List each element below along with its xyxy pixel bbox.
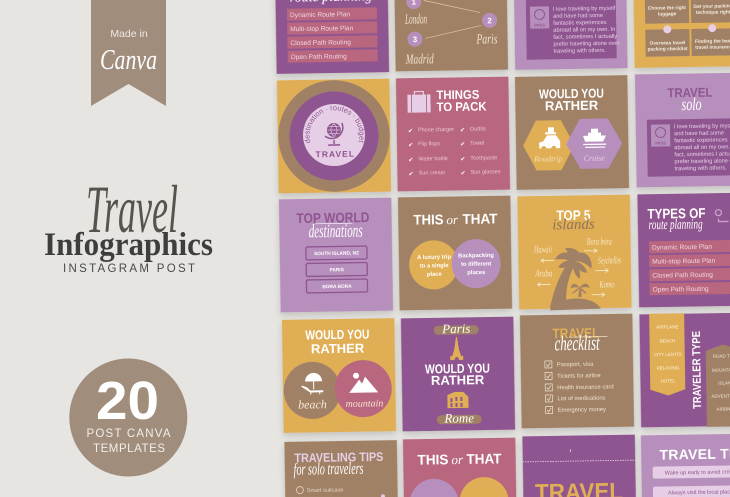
title block: INSTAGRAM POST <box>63 263 195 275</box>
card: route map <box>394 0 508 71</box>
card: things to pack: TO PACK <box>436 99 487 114</box>
card: travel checklist: TRAVEL <box>552 325 600 341</box>
card: packing tips: luggage <box>658 11 677 18</box>
card: travel solo: traveling with others. <box>675 165 727 172</box>
card: things to pack <box>396 77 510 191</box>
card: things to pack: ✔ <box>408 142 413 149</box>
card: travel globe badge <box>274 78 394 199</box>
card: solo text top: I love traveling by myself <box>553 6 616 13</box>
card: top world destinations: destinations <box>308 221 363 242</box>
card: things to pack: THINGS <box>436 88 479 102</box>
card: things to pack: Water bottle <box>418 156 448 163</box>
card: route planning top: Multi-stop Route Plan <box>290 25 354 33</box>
icon: palm tree <box>549 247 601 310</box>
card: top world destinations <box>279 198 393 312</box>
icon: car <box>539 127 560 149</box>
icon: ship <box>583 128 606 148</box>
card: things to pack: ✔ <box>460 127 465 134</box>
card: solo text top: fantastic experiences <box>553 20 607 27</box>
card: traveler type: HOTEL <box>661 378 676 384</box>
card: this or that luxury vs backpacking: places <box>467 270 485 276</box>
card: types of route planning: Open Path Routing <box>653 286 709 294</box>
card: things to pack: ✔ <box>460 141 465 148</box>
title block: Infographics <box>44 227 213 263</box>
card: things to pack: Outfits <box>470 126 486 133</box>
card: travel checklist: List of medications <box>557 396 606 402</box>
card: travel checklist: Tickets for airline <box>557 373 601 380</box>
card: top 5 islands: islands <box>552 217 595 233</box>
card: travel tips <box>641 434 730 497</box>
card: solo text top: and have had some <box>553 13 603 20</box>
title block: Travel <box>86 171 178 247</box>
card: would you rather road trip or cruise: RATHER <box>545 98 599 113</box>
card: top 5 islands: Seychelles <box>598 255 621 267</box>
card: travel solo: and have had some <box>674 130 724 137</box>
card: would you rather road trip or cruise <box>515 75 629 190</box>
card: top 5 islands: Aruba <box>535 268 552 280</box>
card: this or that luxury vs backpacking: to different <box>461 261 491 268</box>
card: top 5 islands: Bora bora <box>587 236 612 248</box>
card: things to pack: Sun cream <box>419 170 446 177</box>
card: top world destinations: PARIS <box>330 267 345 273</box>
card: top world destinations: TOP WORLD <box>296 209 370 226</box>
card: route planning top: Closed Path Routing <box>290 39 351 47</box>
card: this or that pink: THIS <box>417 451 449 468</box>
card: things to pack: Flip flops <box>418 141 440 148</box>
card: things to pack: ✔ <box>461 170 466 177</box>
card: traveling tips for solo travelers: TRAVELING TIPS <box>294 450 383 465</box>
card: top 5 islands: Komo <box>599 279 615 291</box>
card: types of route planning: Closed Path Routing <box>652 272 713 280</box>
card: route map: 3 <box>413 35 418 44</box>
card: travel globe badge: TRAVEL <box>316 149 355 159</box>
card: top 5 islands: TOP 5 <box>556 207 591 223</box>
icon: eiffel tower <box>450 337 463 360</box>
card: would you rather road trip or cruise: Cruise <box>584 153 606 163</box>
ribbon badge: Made in Canva: Canva <box>100 44 157 76</box>
card: types of route planning: route planning <box>648 217 703 233</box>
card: this or that luxury vs backpacking: THAT <box>462 210 498 227</box>
card: things to pack: Towel <box>470 141 484 147</box>
card: types of route planning <box>637 193 730 307</box>
card: would you rather beach or mountain: mountain <box>345 398 383 410</box>
arrows <box>537 248 609 298</box>
icon: colosseum <box>447 392 469 408</box>
card: types of route planning: TYPES OF <box>647 205 706 222</box>
card: packing tips: packing checklist <box>648 46 688 53</box>
card: travel solo: TRAVEL <box>667 85 713 100</box>
card: travel solo: PASS <box>655 140 666 146</box>
card: types of route planning: Multi-stop Route Plan <box>652 258 716 266</box>
card: this or that pink <box>403 438 517 497</box>
ribbon badge: Made in Canva <box>91 0 166 106</box>
card: types of route planning: Dynamic Route Plan <box>652 244 712 252</box>
card: traveler type: AIRPLANE <box>656 324 678 330</box>
card: this or that luxury vs backpacking: Backpacking <box>458 253 494 259</box>
card: travel cover purple <box>522 435 637 497</box>
card: would you rather paris or rome: Paris <box>441 321 470 336</box>
card: top 5 islands <box>517 195 632 311</box>
card: travel checklist <box>520 314 634 428</box>
card: travel globe badge: destination · routes · budget <box>304 106 364 143</box>
card: top world destinations: BORA BORA <box>322 284 352 290</box>
card: this or that luxury vs backpacking: THIS <box>413 211 444 228</box>
card: things to pack: ✔ <box>460 156 465 163</box>
card: route planning top: Open Path Routing <box>291 53 347 61</box>
card: route map: 2 <box>487 16 492 25</box>
icon: mountain and sun <box>349 372 378 393</box>
card: this or that luxury vs backpacking: to a single <box>420 263 449 270</box>
card: would you rather paris or rome <box>401 317 515 431</box>
card: solo text top: PASS <box>534 22 545 28</box>
card: things to pack: Sun glasses <box>471 169 501 176</box>
card: top 5 islands: Hawaii <box>533 244 552 256</box>
card: travel solo: fantastic experiences <box>674 137 728 144</box>
card: solo text top: fact, sometimes I actually <box>553 34 617 41</box>
icon: map pin <box>715 209 729 222</box>
icon: beach umbrella and lounger <box>301 373 323 395</box>
card: travel checklist: Emergency money <box>558 407 606 414</box>
card: route map: Madrid <box>405 52 435 68</box>
card: this or that luxury vs backpacking: A luxury trip <box>417 255 452 261</box>
card: traveler type <box>639 312 730 428</box>
card: would you rather road trip or cruise: Roadtrip <box>533 154 563 164</box>
all template cards <box>273 0 730 497</box>
card: this or that pink: or <box>451 452 464 467</box>
card: would you rather paris or rome: RATHER <box>431 372 485 388</box>
card: traveler type: BEACH <box>660 338 675 344</box>
card: travel solo: solo <box>681 94 702 114</box>
card: traveler type: RELAXING <box>657 365 680 371</box>
card: this or that pink: THAT <box>466 450 502 467</box>
card: would you rather road trip or cruise: WOULD YOU <box>539 85 604 102</box>
icon: globe <box>325 123 343 145</box>
card: would you rather beach or mountain: WOULD YOU <box>305 327 369 343</box>
ribbon badge: Made in Canva: Made in <box>110 28 148 40</box>
card: things to pack: Toothpaste <box>470 155 497 162</box>
card: route planning top: Dynamic Route Plan <box>290 11 350 19</box>
card: would you rather beach or mountain: RATHER <box>311 341 365 356</box>
card: solo text top: abroad all on my own. In <box>553 27 615 34</box>
badge: 20 post canva templates: 20 <box>96 371 159 431</box>
card: things to pack: ✔ <box>408 157 413 164</box>
badge: 20 post canva templates <box>69 358 187 476</box>
card: traveling tips for solo travelers <box>284 440 399 497</box>
card: this or that luxury vs backpacking: place <box>427 272 443 278</box>
card: things to pack: ✔ <box>408 128 413 135</box>
card: solo text top: traveling with others. <box>554 48 606 55</box>
card: traveling tips for solo travelers: Smart suitcase <box>307 487 343 494</box>
card: packing tips <box>633 0 730 68</box>
card: packing tips: Choose the right <box>648 5 686 12</box>
card: things to pack: Phone charger <box>418 127 454 134</box>
card: travel solo <box>635 73 730 187</box>
card: packing tips: technique right <box>696 9 730 16</box>
card: this or that luxury vs backpacking: or <box>446 212 459 227</box>
badge: 20 post canva templates: TEMPLATES <box>93 443 165 455</box>
card: would you rather beach or mountain: beach <box>298 397 327 412</box>
card: travel checklist: checklist <box>554 331 600 355</box>
card: traveler type: TRAVELER TYPE <box>691 331 704 409</box>
card: route map: Paris <box>476 32 498 48</box>
title block <box>44 171 213 275</box>
card: would you rather paris or rome: Rome <box>443 410 474 426</box>
card: solo text top <box>513 0 628 70</box>
card: route planning top <box>275 0 389 74</box>
card: things to pack: ✔ <box>409 171 414 178</box>
badge: 20 post canva templates: POST CANVA <box>86 428 171 440</box>
icon: suitcase <box>407 91 431 113</box>
card: top world destinations: SOUTH ISLAND, NZ <box>314 250 359 257</box>
card: travel checklist: Health insurance card <box>557 384 614 391</box>
card: route map: London <box>404 12 427 28</box>
card: travel checklist: Passport, visa <box>557 362 594 368</box>
card: traveler type: CITY LIGHTS <box>654 352 682 357</box>
card: this or that luxury vs backpacking <box>398 196 512 310</box>
card: solo text top: prefer traveling alone over <box>553 41 620 48</box>
card: traveling tips for solo travelers: for solo travelers <box>293 459 364 479</box>
card: would you rather paris or rome: WOULD YOU <box>425 360 490 377</box>
card: packing tips: Overseas travel <box>650 40 685 47</box>
card: would you rather beach or mountain <box>282 318 396 433</box>
